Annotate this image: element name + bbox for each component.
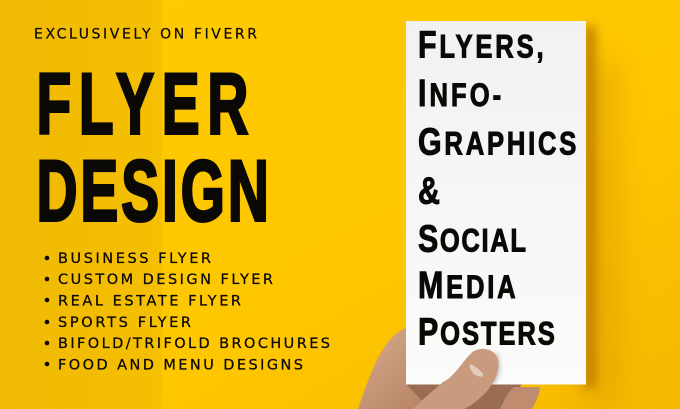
item: food and menu designs: FOOD AND MENU DESIGNS <box>58 358 303 374</box>
item: bifold brochures: BIFOLD/TRIFOLD BROCHURES <box>58 336 330 352</box>
title <box>36 57 269 239</box>
card text: & <box>418 170 440 212</box>
card text: POSTERS <box>418 311 555 353</box>
card text <box>418 24 576 353</box>
card text: GRAPHICS <box>418 121 576 163</box>
card text: INFO- <box>418 73 501 115</box>
tagline: EXCLUSIVELY ON FIVERR <box>34 26 257 42</box>
item: business flyer: BUSINESS FLYER <box>58 251 211 267</box>
icon: lower finger <box>500 387 540 409</box>
darker left panel <box>0 0 162 409</box>
bullet list <box>45 251 330 374</box>
icon: thumb <box>413 349 500 409</box>
card text: SOCIAL <box>418 218 526 260</box>
icon: palm shadow under card <box>406 384 522 409</box>
card text: FLYERS, <box>418 24 544 66</box>
white flyer card <box>406 21 586 384</box>
item: sports flyer: SPORTS FLYER <box>58 315 191 331</box>
item: custom design flyer: CUSTOM DESIGN FLYER <box>58 272 273 288</box>
item: real estate flyer: REAL ESTATE FLYER <box>58 294 241 310</box>
icon: hand behind card <box>358 327 450 409</box>
title: FLYER <box>36 57 248 152</box>
card shadow <box>583 26 617 405</box>
card text: MEDIA <box>418 265 516 307</box>
thumbnail <box>470 364 483 377</box>
title: DESIGN <box>36 144 269 239</box>
